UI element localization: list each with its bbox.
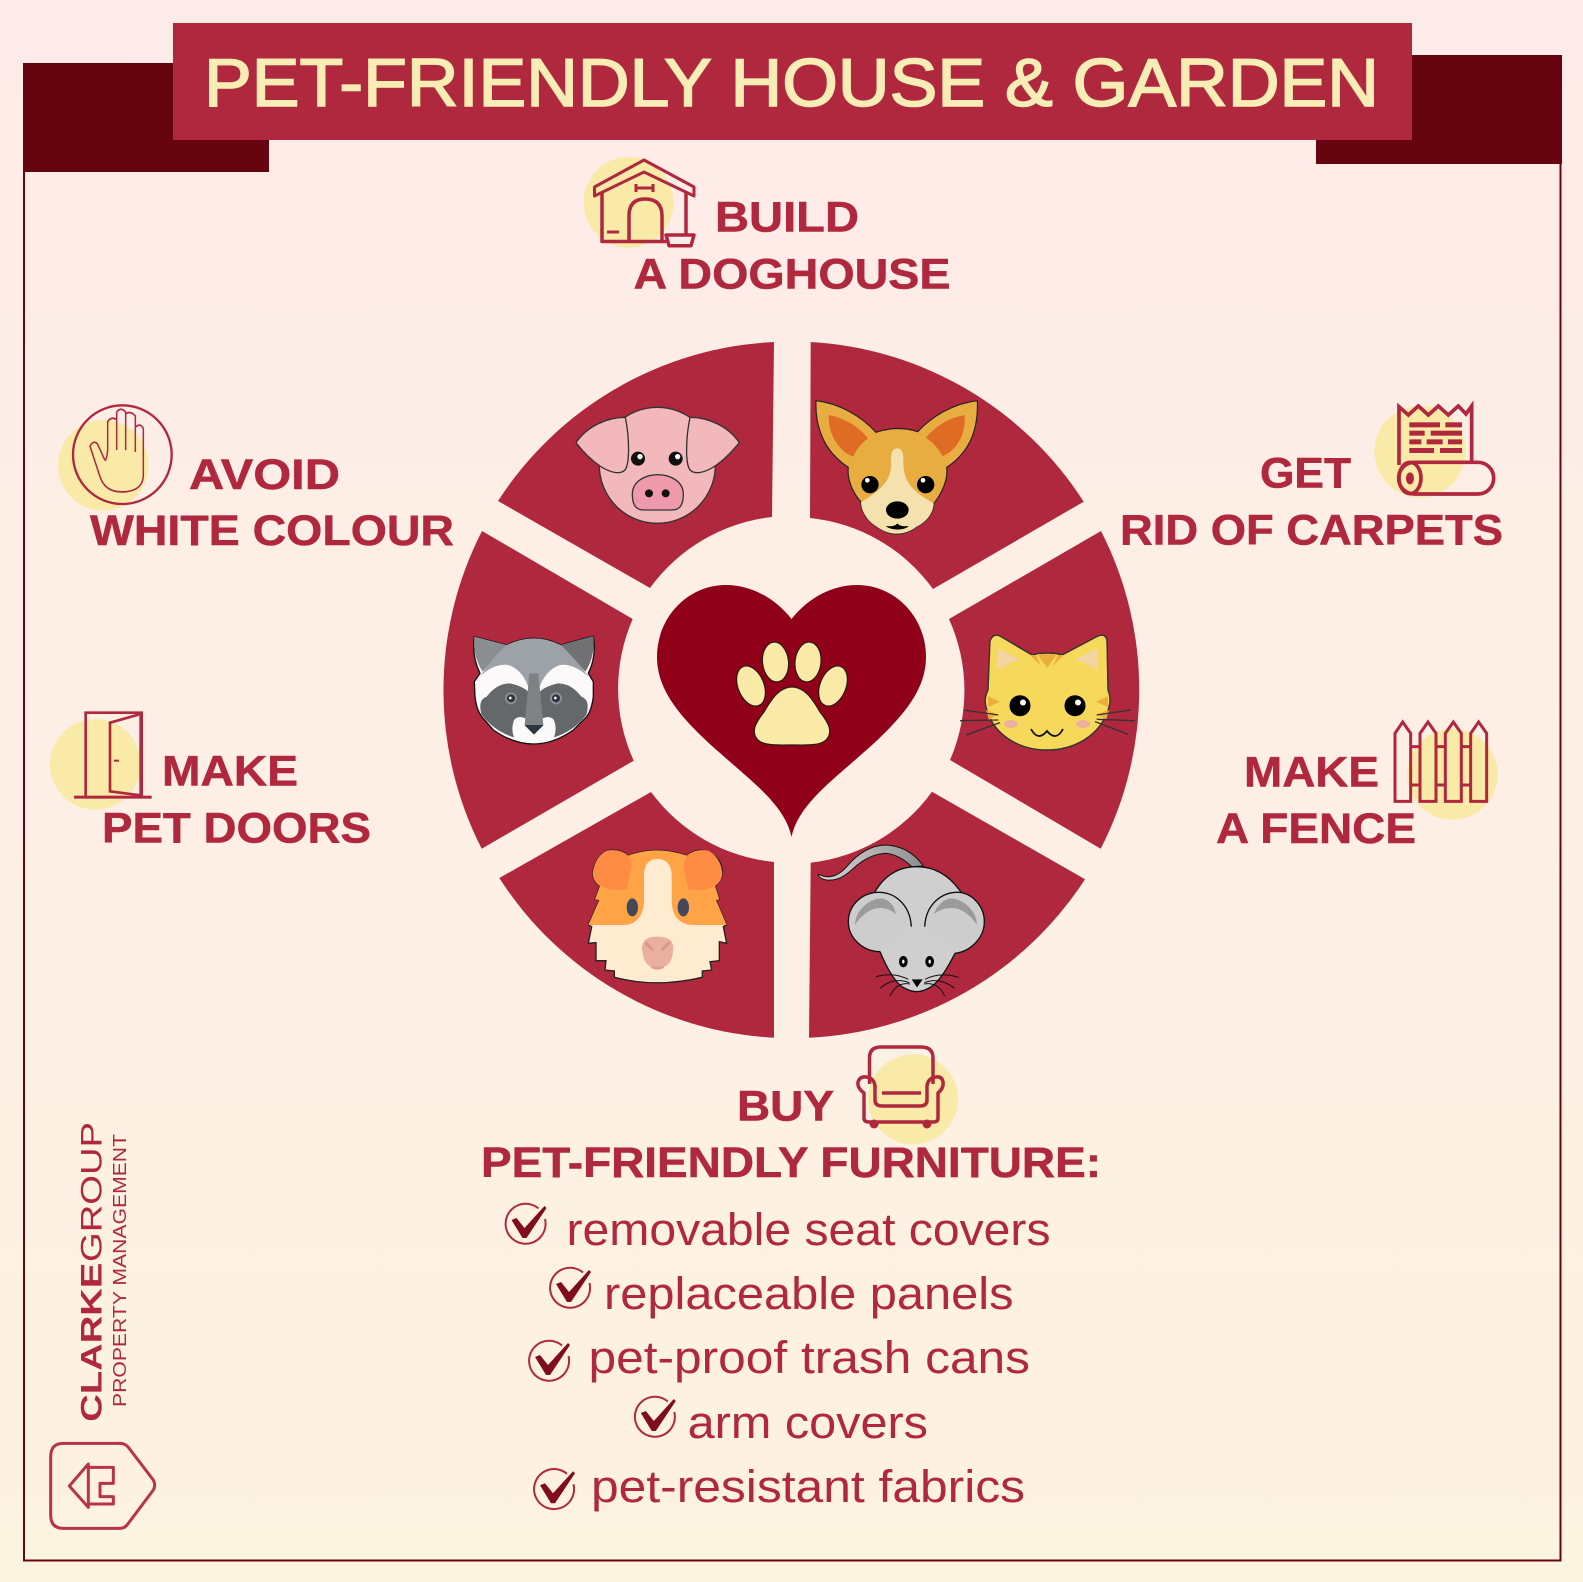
label: build a doghouse: BUILD: [715, 194, 859, 242]
label: make a fence: [1216, 748, 1416, 853]
label: make a fence: MAKE: [1244, 748, 1379, 796]
label: make a fence: A FENCE: [1216, 805, 1416, 853]
item: get rid of carpets: [1120, 406, 1503, 554]
icon: open door: [50, 713, 152, 810]
icon: doghouse: [584, 157, 694, 248]
list item: arm covers: arm covers: [688, 1397, 928, 1448]
item: buy pet-friendly furniture: [481, 1047, 1101, 1512]
list item: removable seat covers: removable seat covers: [566, 1204, 1050, 1255]
item: make pet doors: [50, 713, 371, 852]
label: buy pet-friendly furniture: [481, 1082, 1101, 1187]
logo wordmark: [76, 1122, 130, 1422]
right corner block: [1316, 55, 1562, 164]
item: avoid white colour: [58, 405, 454, 555]
label: make pet doors: [102, 748, 371, 852]
label: get rid of carpets: [1120, 450, 1503, 554]
animal: cat: [960, 635, 1135, 750]
list item: pet-resistant fabrics: pet-resistant fabrics: [591, 1461, 1025, 1512]
checklist: [506, 1204, 1050, 1512]
logo wordmark: CLARKE: [76, 1263, 109, 1422]
icon: armchair: [858, 1047, 958, 1144]
icon: fence: [1395, 722, 1498, 820]
label: avoid white colour: AVOID: [189, 451, 340, 499]
item: make a fence: [1216, 722, 1498, 853]
animal: pig: [576, 407, 739, 523]
logo icon: house tag: [51, 1443, 155, 1528]
wheel of six sectors: [443, 342, 1139, 1038]
animal: raccoon: [474, 636, 594, 744]
left corner block: [23, 63, 269, 172]
list item: replaceable panels: replaceable panels: [604, 1268, 1014, 1319]
label: make pet doors: PET DOORS: [102, 804, 371, 852]
animal: guinea pig: [588, 850, 727, 983]
label: get rid of carpets: RID OF CARPETS: [1120, 506, 1503, 554]
label: make pet doors: MAKE: [162, 748, 298, 796]
logo wordmark: GROUP: [76, 1122, 109, 1262]
label: build a doghouse: [634, 194, 950, 298]
icon: carpet roll: [1374, 406, 1494, 497]
list item: pet-proof trash cans: pet-proof trash cans: [588, 1332, 1030, 1383]
logo: clarke group: [51, 1122, 155, 1528]
title banner: PET-FRIENDLY HOUSE & GARDEN: [204, 45, 1379, 121]
icon: stop hand: [58, 405, 172, 511]
label: build a doghouse: A DOGHOUSE: [634, 250, 950, 298]
label: get rid of carpets: GET: [1260, 450, 1351, 498]
label: buy pet-friendly furniture: PET-FRIENDLY FURNITURE:: [481, 1139, 1101, 1187]
animal: chihuahua: [816, 401, 977, 534]
item: build a doghouse: [584, 157, 950, 298]
label: avoid white colour: WHITE COLOUR: [90, 507, 454, 555]
label: buy pet-friendly furniture: BUY: [737, 1082, 834, 1130]
heart with paw: [657, 585, 926, 837]
label: avoid white colour: [90, 451, 454, 555]
title banner: [173, 23, 1412, 140]
logo wordmark: PROPERTY MANAGEMENT: [109, 1134, 130, 1407]
animal: mouse: [818, 845, 984, 996]
